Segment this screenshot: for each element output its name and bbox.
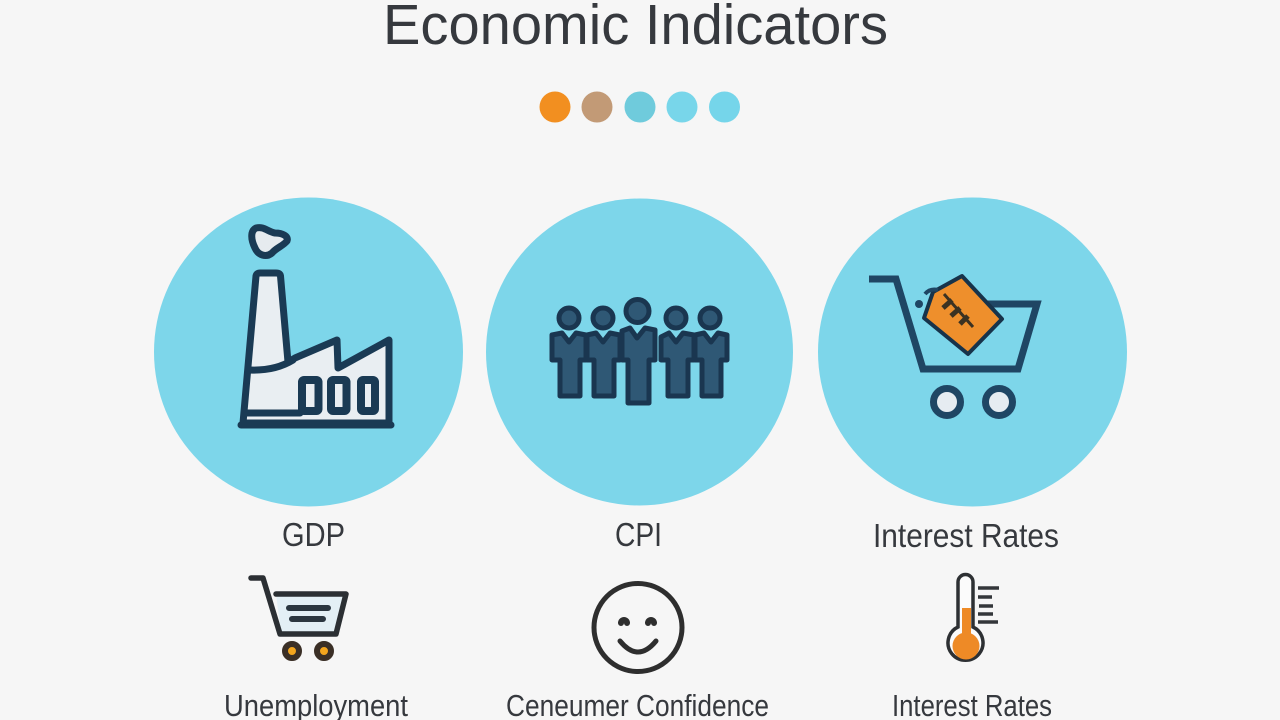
CPI circle (486, 198, 793, 506)
GDP label: GDP (282, 516, 345, 553)
Interest Rates circle (818, 198, 1127, 506)
CPI label: CPI (615, 516, 662, 553)
icon: group of people (552, 300, 727, 403)
icon: smiley face (594, 584, 682, 672)
Interest Rates label: Interest Rates (873, 517, 1059, 554)
panel: GDP (154, 198, 463, 553)
panel: CPI (486, 198, 793, 553)
icon: shopping cart with price tag (869, 276, 1037, 416)
panel: Consumer Confidence (506, 584, 769, 720)
panel: Interest Rates bottom (892, 575, 1052, 720)
icon: small shopping cart (251, 578, 346, 658)
colour dots row (540, 92, 740, 122)
icon: factory (241, 228, 391, 425)
GDP circle (154, 198, 463, 506)
panel: Unemployment (224, 578, 408, 720)
icon: thermometer (948, 575, 999, 660)
panel: Interest Rates top (818, 198, 1127, 554)
